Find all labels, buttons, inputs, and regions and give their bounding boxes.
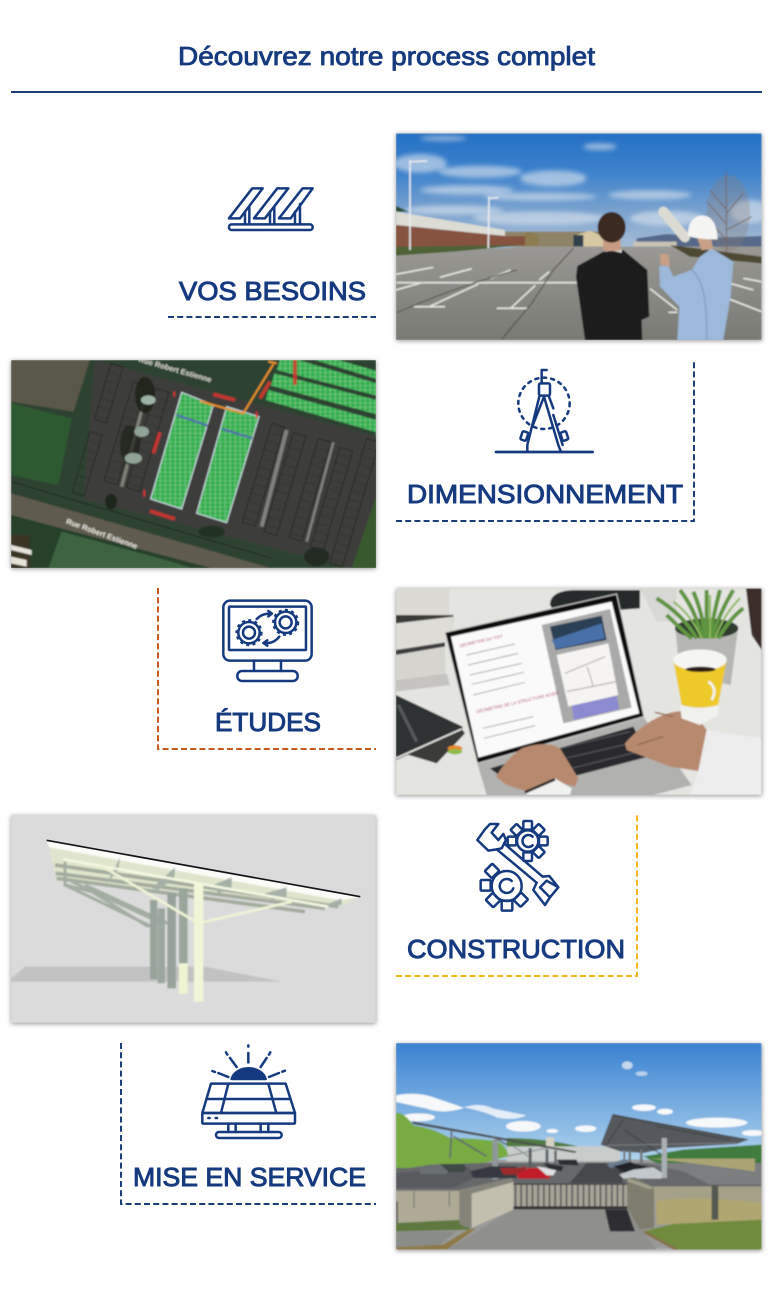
photo: engineer working on laptop: GÉOMÉTRIE DE LA STRUCTURE ACIER xyxy=(476,689,560,714)
dashed underline xyxy=(168,316,376,318)
photo: engineer working on laptop: GÉOMÉTRIE DU TOIT xyxy=(459,633,504,648)
panel: études xyxy=(158,588,762,796)
heading: construction: CONSTRUCTION xyxy=(407,934,625,964)
photo: aerial solar layout: Rue Robert Estienne xyxy=(138,355,213,384)
heading: mise en service: MISE EN SERVICE xyxy=(133,1162,366,1192)
heading: dimensionnement: DIMENSIONNEMENT xyxy=(407,479,683,509)
icon: monitor with gears xyxy=(223,601,312,681)
panel: vos besoins xyxy=(168,133,770,341)
title: Découvrez notre process complet xyxy=(178,41,596,71)
photo: 3D carport model xyxy=(11,815,376,1024)
dashed frame xyxy=(396,815,637,976)
icon: solar panel rows xyxy=(229,188,313,230)
dashed frame xyxy=(121,1043,376,1204)
photo: two men in empty car park xyxy=(393,133,770,341)
photo: aerial solar layout: Rue Robert Estienne xyxy=(65,517,139,551)
photo: aerial solar layout xyxy=(11,355,379,569)
dashed frame xyxy=(158,588,376,749)
photo: completed solar carports xyxy=(396,1043,765,1251)
panel: mise en service xyxy=(121,1043,765,1251)
panel: dimensionnement xyxy=(11,355,694,569)
heading: vos besoins: VOS BESOINS xyxy=(179,276,366,306)
dashed frame xyxy=(396,360,694,521)
icon: wrench and gears xyxy=(477,821,558,911)
panel: construction xyxy=(11,815,637,1024)
title divider xyxy=(11,91,762,93)
photo: engineer working on laptop xyxy=(396,588,762,796)
heading: études: ÉTUDES xyxy=(215,707,321,737)
icon: compass xyxy=(496,370,593,452)
icon: solar panel with sun xyxy=(202,1045,295,1138)
